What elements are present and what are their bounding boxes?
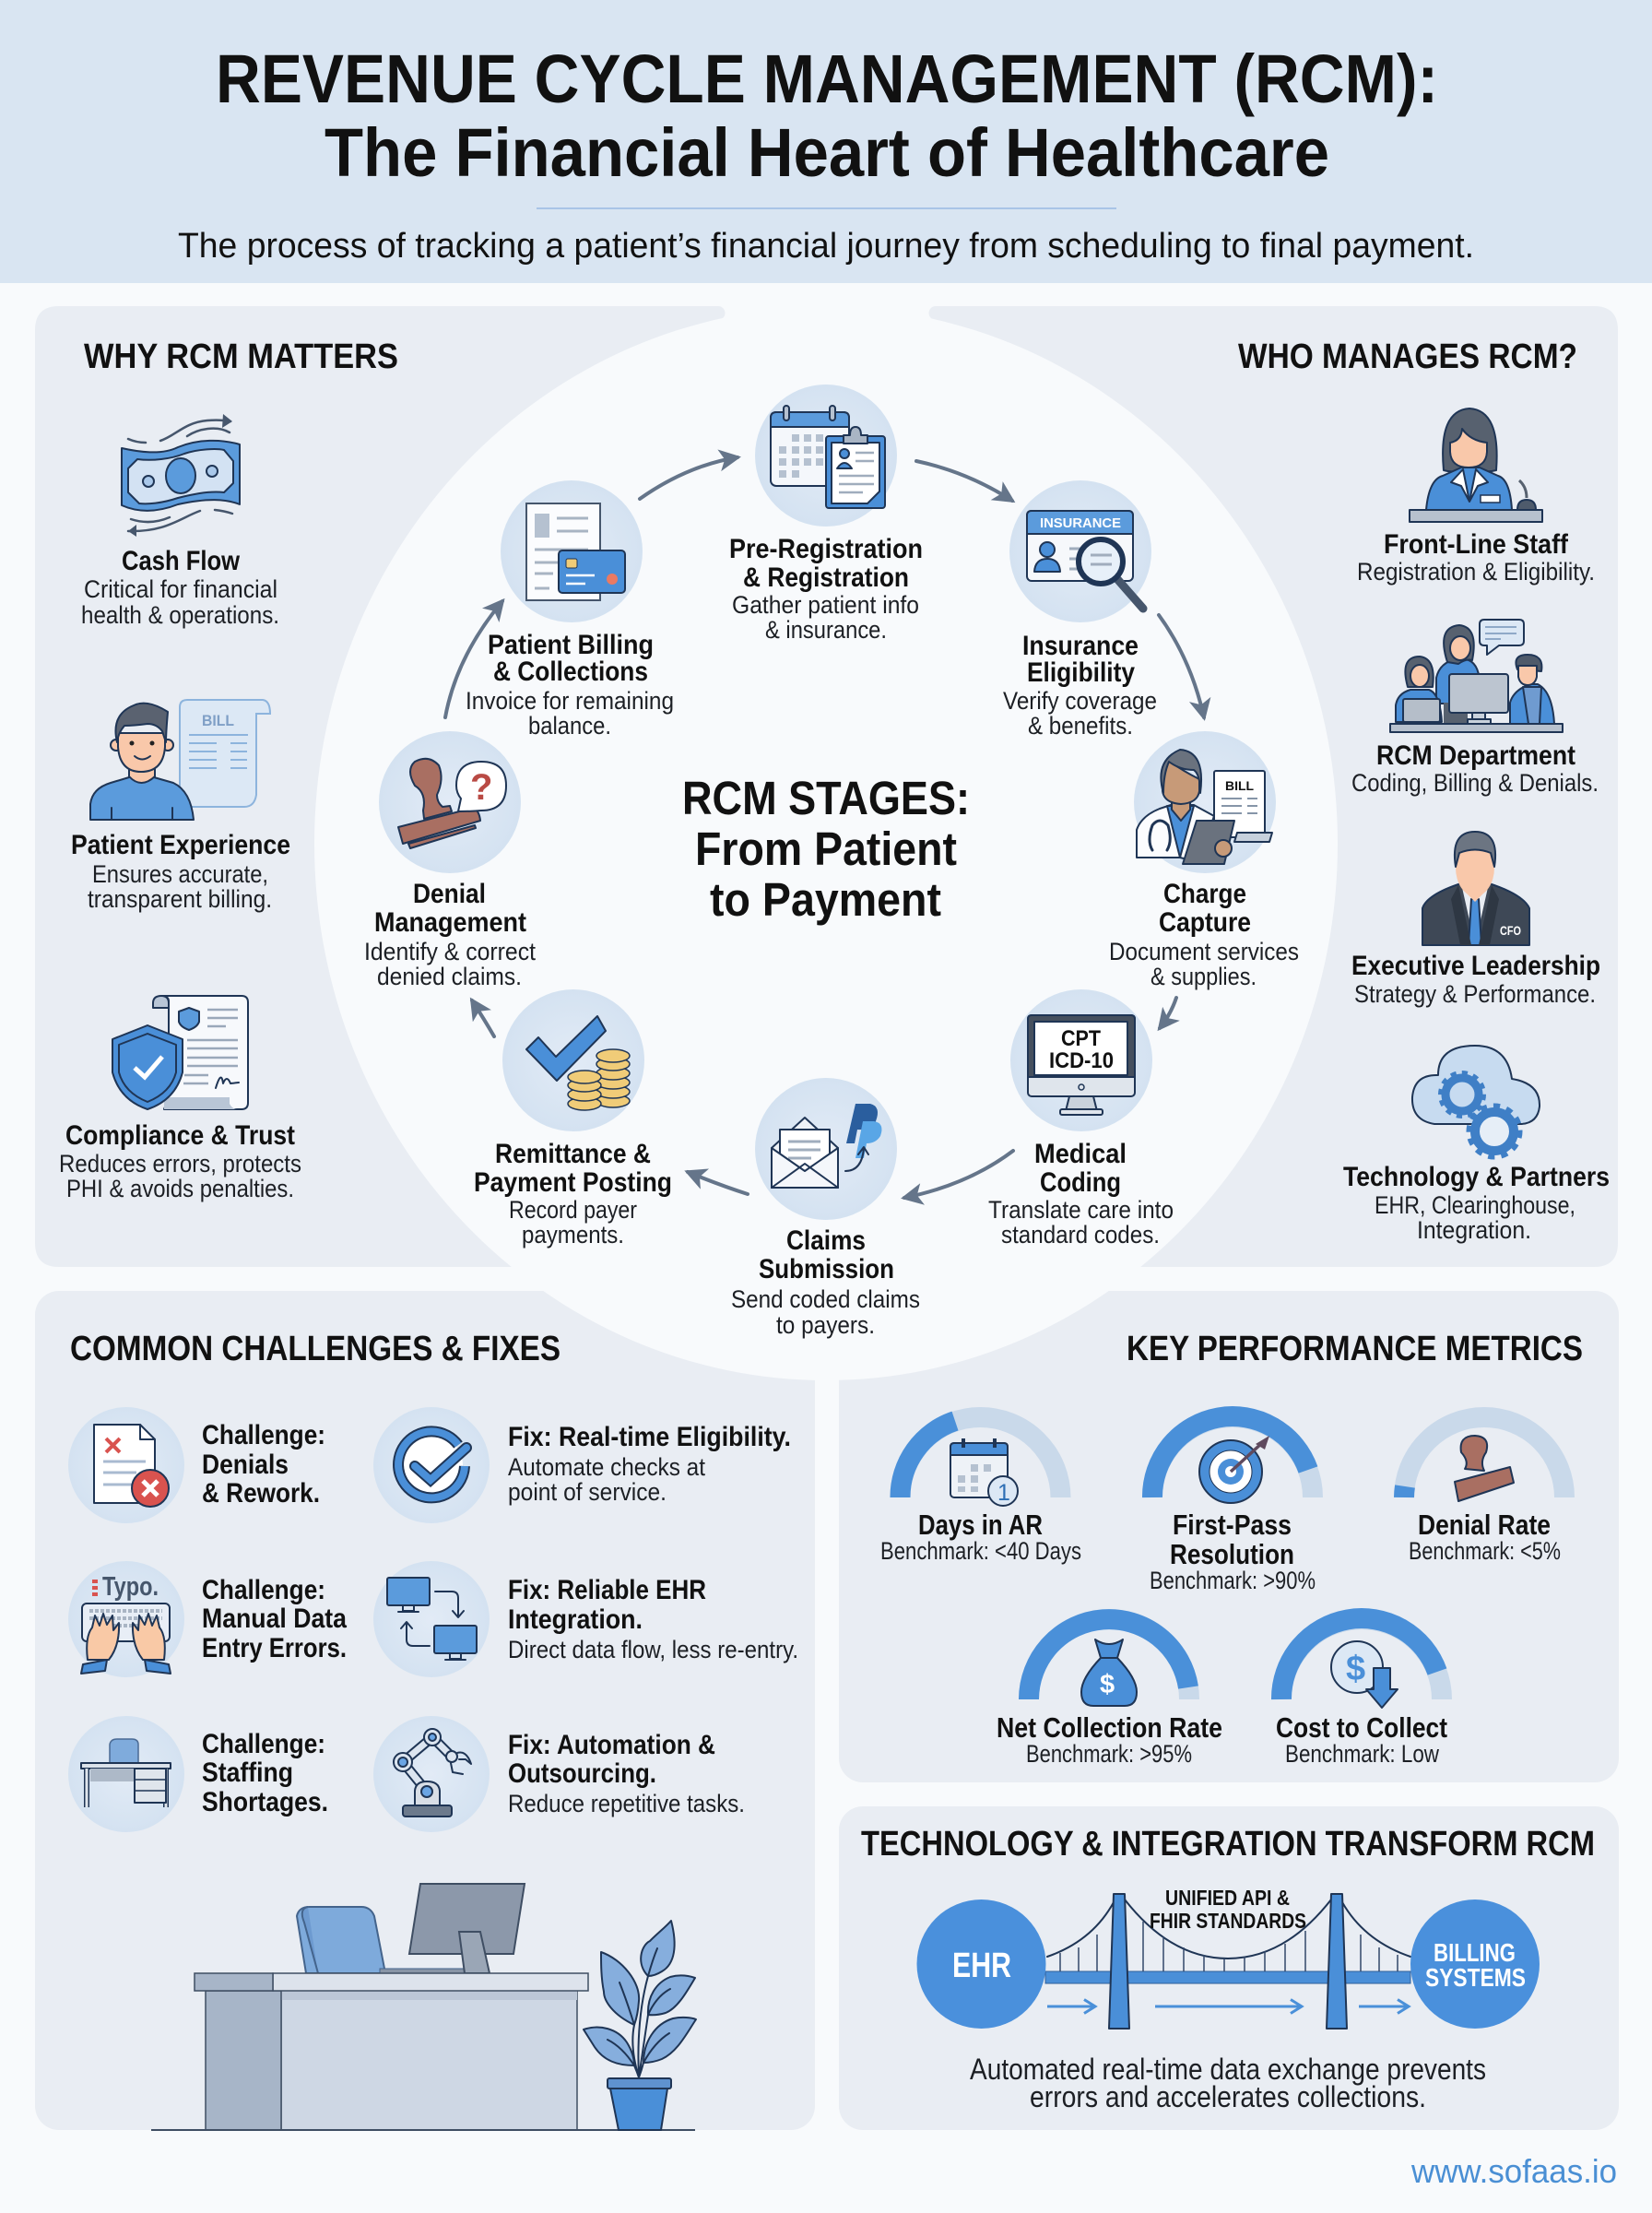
stage 8: patient billing: balance. [528, 712, 611, 740]
stage 4: medical coding: ICD-10 [1049, 1048, 1114, 1073]
arrow: billing to pre-registration [640, 457, 738, 499]
panel: why RCM matters [59, 337, 398, 1202]
icon: shield and document [112, 996, 248, 1109]
stage 4: medical coding: Translate care into [988, 1196, 1174, 1224]
challenge: manual data entry: Entry Errors. [202, 1633, 347, 1663]
icon: patient with bill [90, 700, 270, 820]
subtitle: The process of tracking a patient’s financial journey from scheduling to final payment. [178, 227, 1474, 266]
stage 1: pre-registration: Pre-Registration [729, 534, 923, 564]
center title: RCM STAGES: [682, 772, 970, 824]
challenge: manual data entry: Manual Data [202, 1604, 347, 1634]
stage 4: medical coding: standard codes. [1001, 1221, 1160, 1249]
challenge: staffing shortages: Staffing [202, 1757, 293, 1788]
text: technology and partners: Integration. [1417, 1216, 1531, 1244]
text: RCM department: Coding, Billing & Denials. [1351, 769, 1599, 797]
illustration: desk, monitor and plant [151, 1884, 696, 2130]
stage 7: denial management: Management [374, 907, 526, 938]
text: executive leadership: Executive Leadership [1351, 951, 1600, 981]
text: executive leadership: Strategy & Performance. [1354, 980, 1596, 1008]
text: compliance and trust: Reduces errors, protects [59, 1150, 301, 1178]
center title: to Payment [710, 873, 941, 926]
challenge: staffing shortages: Challenge: [202, 1729, 325, 1759]
panel: who manages RCM background [929, 306, 1618, 1267]
center title: From Patient [695, 822, 957, 875]
metric: days in AR: 1 [997, 1480, 1010, 1506]
text: compliance and trust: PHI & avoids penalties. [66, 1175, 294, 1202]
arrow: pre-registration to insurance [916, 461, 1012, 501]
stage 6: remittance and payment posting: Payment Posting [474, 1167, 672, 1198]
stage 4: medical coding: Medical [1034, 1139, 1127, 1169]
stage 2: insurance eligibility: Verify coverage [1003, 687, 1157, 715]
website footer: www.sofaas.io [1410, 2152, 1617, 2190]
stage 3: charge capture: Capture [1159, 907, 1251, 938]
bridge label [1150, 1886, 1306, 1933]
metric: first-pass resolution: Benchmark: >90% [1150, 1567, 1316, 1594]
text: compliance and trust [59, 1120, 301, 1202]
stage 1: pre-registration: Gather patient info [732, 591, 919, 619]
text: front-line staff [1357, 529, 1595, 586]
text: cash flow: Critical for financial [84, 575, 277, 603]
icon: patient with bill: BILL [202, 712, 234, 729]
stage 6: remittance and payment posting [474, 989, 672, 1249]
node: EHR [916, 1899, 1045, 2029]
stage 4: medical coding [988, 989, 1174, 1249]
text: patient experience: transparent billing. [88, 885, 272, 913]
metric: first-pass resolution [1150, 1416, 1316, 1594]
stage 6: remittance and payment posting: Record payer [509, 1196, 637, 1224]
metric: days in AR: Days in AR [918, 1509, 1043, 1541]
metric: denial rate: Benchmark: <5% [1409, 1537, 1561, 1565]
challenge: denials and rework [68, 1407, 325, 1523]
metric: cost to collect: Cost to Collect [1276, 1711, 1447, 1744]
challenge: staffing shortages [68, 1716, 328, 1832]
stage 1: pre-registration: & insurance. [765, 616, 887, 644]
stage 7: denial management: Denial [413, 879, 486, 909]
bridge label: FHIR STANDARDS [1150, 1909, 1306, 1933]
text: front-line staff: Front-Line Staff [1384, 529, 1569, 560]
metric: denial rate: Denial Rate [1418, 1509, 1551, 1541]
stage 8: patient billing: Patient Billing [488, 630, 654, 660]
text: RCM department [1351, 740, 1599, 797]
stage 8: patient billing: Invoice for remaining [466, 687, 674, 715]
fix: real-time eligibility: Automate checks at [508, 1453, 705, 1481]
text: technology and partners [1343, 1162, 1610, 1244]
stage 5: claims submission: to payers. [776, 1311, 875, 1339]
arrow: claims to remittance [688, 1172, 748, 1194]
heading: COMMON CHALLENGES & FIXES [70, 1330, 560, 1368]
diagram: RCM stages cycle [364, 385, 1299, 1339]
stage 7: denial management [364, 731, 536, 990]
stage 3: charge capture: Document services [1109, 938, 1299, 965]
fix: automation and outsourcing: Outsourcing. [508, 1758, 656, 1789]
arrow: charge capture to coding [1160, 998, 1176, 1028]
panel: why RCM matters background [35, 306, 725, 1267]
icon: cloud with gears [1412, 1046, 1540, 1156]
text: patient experience: Ensures accurate, [92, 860, 268, 888]
fix: reliable EHR integration [373, 1561, 798, 1677]
metric: net collection rate [997, 1619, 1222, 1768]
stage 5: claims submission: Claims [786, 1225, 866, 1256]
fix: reliable EHR integration: Integration. [508, 1604, 643, 1635]
challenge: manual data entry [68, 1561, 347, 1677]
fix: automation and outsourcing: Fix: Automation & [508, 1730, 715, 1760]
heading: KEY PERFORMANCE METRICS [1127, 1330, 1583, 1368]
metric: first-pass resolution: First-Pass [1173, 1509, 1292, 1541]
text: compliance and trust: Compliance & Trust [65, 1120, 295, 1151]
text: technology and partners: EHR, Clearinghouse, [1375, 1191, 1575, 1219]
node: EHR: EHR [952, 1947, 1011, 1985]
panel: key performance metrics [880, 1330, 1583, 1768]
stage 3: charge capture: BILL [1225, 778, 1254, 793]
stage 6: remittance and payment posting: payments. [522, 1221, 624, 1249]
stage 2: insurance eligibility: Insurance [1022, 631, 1139, 661]
arrow: coding to claims [904, 1151, 1013, 1198]
icon: executive: CFO [1500, 923, 1521, 938]
challenge: manual data entry: Challenge: [202, 1575, 325, 1605]
arrow: remittance to denial [472, 1000, 494, 1036]
challenge: denials and rework: Challenge: [202, 1420, 325, 1450]
central white circle [314, 307, 1338, 1380]
fix: reliable EHR integration: Direct data flow, less re-entry. [508, 1636, 798, 1663]
text: patient experience: Patient Experience [71, 830, 290, 860]
fix: real-time eligibility: Fix: Real-time Eligibility. [508, 1422, 791, 1452]
stage 5: claims submission [731, 1078, 920, 1339]
metric: cost to collect [1276, 1618, 1447, 1768]
caption: Automated real-time data exchange prevents [970, 2053, 1486, 2086]
stage 3: charge capture: Charge [1163, 879, 1246, 909]
stage 8: patient billing: & Collections [493, 657, 648, 687]
icon: executive [1422, 832, 1529, 945]
panel: technology and integration [861, 1825, 1595, 2113]
metric: net collection rate: $ [1100, 1670, 1115, 1699]
heading: WHO MANAGES RCM? [1238, 337, 1577, 376]
stage 2: insurance eligibility: & benefits. [1028, 712, 1133, 740]
stage 4: medical coding: Coding [1040, 1167, 1121, 1198]
stage 2: insurance eligibility: INSURANCE [1040, 515, 1121, 531]
metric: denial rate [1404, 1417, 1564, 1565]
stage 3: charge capture [1109, 731, 1299, 990]
stage 5: claims submission: Send coded claims [731, 1285, 920, 1313]
text: RCM department: RCM Department [1376, 740, 1575, 771]
metric: first-pass resolution: Resolution [1170, 1538, 1294, 1570]
metric: cost to collect: $ [1346, 1650, 1365, 1688]
node: billing systems [1410, 1899, 1540, 2029]
stage 2: insurance eligibility [1003, 480, 1157, 740]
arrow: insurance to charge capture [1159, 615, 1204, 717]
text: cash flow [81, 546, 279, 629]
stage 7: denial management: Identify & correct [364, 938, 536, 965]
challenge: manual data entry: Typo. [102, 1572, 159, 1602]
panel: common challenges and fixes [68, 1330, 798, 2130]
stage 7: denial management: ? [470, 767, 492, 808]
panel: technology and integration background [839, 1806, 1619, 2130]
challenge: staffing shortages: Shortages. [202, 1787, 328, 1817]
title: REVENUE CYCLE MANAGEMENT (RCM): [216, 41, 1438, 117]
icon: front-line staff [1410, 408, 1542, 522]
header band [0, 0, 1652, 283]
title: The Financial Heart of Healthcare [324, 114, 1329, 191]
caption: errors and accelerates collections. [1030, 2080, 1426, 2113]
stage 4: medical coding: CPT [1061, 1026, 1101, 1051]
title [216, 41, 1438, 191]
stage 8: patient billing [466, 480, 674, 740]
text: front-line staff: Registration & Eligibility. [1357, 558, 1595, 586]
icon: cash flow [122, 414, 240, 537]
bridge label: UNIFIED API & [1165, 1886, 1290, 1910]
fix: real-time eligibility: point of service. [508, 1478, 667, 1506]
panel: common challenges background [35, 1291, 815, 2130]
caption [970, 2053, 1486, 2113]
bridge illustration [1045, 1894, 1410, 2029]
stage 6: remittance and payment posting: Remittance & [495, 1139, 651, 1169]
panel: key performance metrics background [839, 1291, 1619, 1782]
challenge: denials and rework: Denials [202, 1450, 289, 1480]
center title [682, 772, 970, 926]
fix: real-time eligibility [373, 1407, 791, 1523]
text: cash flow: health & operations. [81, 601, 279, 629]
arrow: denial to billing [445, 601, 502, 717]
fix: automation and outsourcing: Reduce repetitive tasks. [508, 1790, 745, 1817]
text: technology and partners: Technology & Partners [1343, 1162, 1610, 1192]
fix: automation and outsourcing [373, 1716, 745, 1832]
metric: days in AR: Benchmark: <40 Days [880, 1537, 1081, 1565]
stage 1: pre-registration [729, 385, 923, 644]
metric: cost to collect: Benchmark: Low [1285, 1740, 1439, 1768]
metric: net collection rate: Benchmark: >95% [1026, 1740, 1192, 1768]
text: executive leadership [1351, 951, 1600, 1008]
stage 5: claims submission: Submission [759, 1254, 894, 1284]
stage 7: denial management: denied claims. [377, 963, 522, 990]
text: cash flow: Cash Flow [122, 546, 241, 576]
node: billing systems: SYSTEMS [1425, 1963, 1526, 1992]
metric: days in AR [880, 1417, 1081, 1565]
challenge: denials and rework: & Rework. [202, 1478, 320, 1509]
heading: WHY RCM MATTERS [84, 337, 398, 376]
panel: who manages RCM [1238, 337, 1610, 1244]
stage 2: insurance eligibility: Eligibility [1027, 657, 1135, 688]
metric: net collection rate: Net Collection Rate [997, 1711, 1222, 1744]
fix: reliable EHR integration: Fix: Reliable EHR [508, 1575, 706, 1605]
node: billing systems: BILLING [1434, 1938, 1516, 1967]
text: patient experience [71, 830, 290, 913]
stage 1: pre-registration: & Registration [743, 562, 909, 593]
stage 3: charge capture: & supplies. [1150, 963, 1257, 990]
icon: RCM department [1390, 620, 1563, 732]
